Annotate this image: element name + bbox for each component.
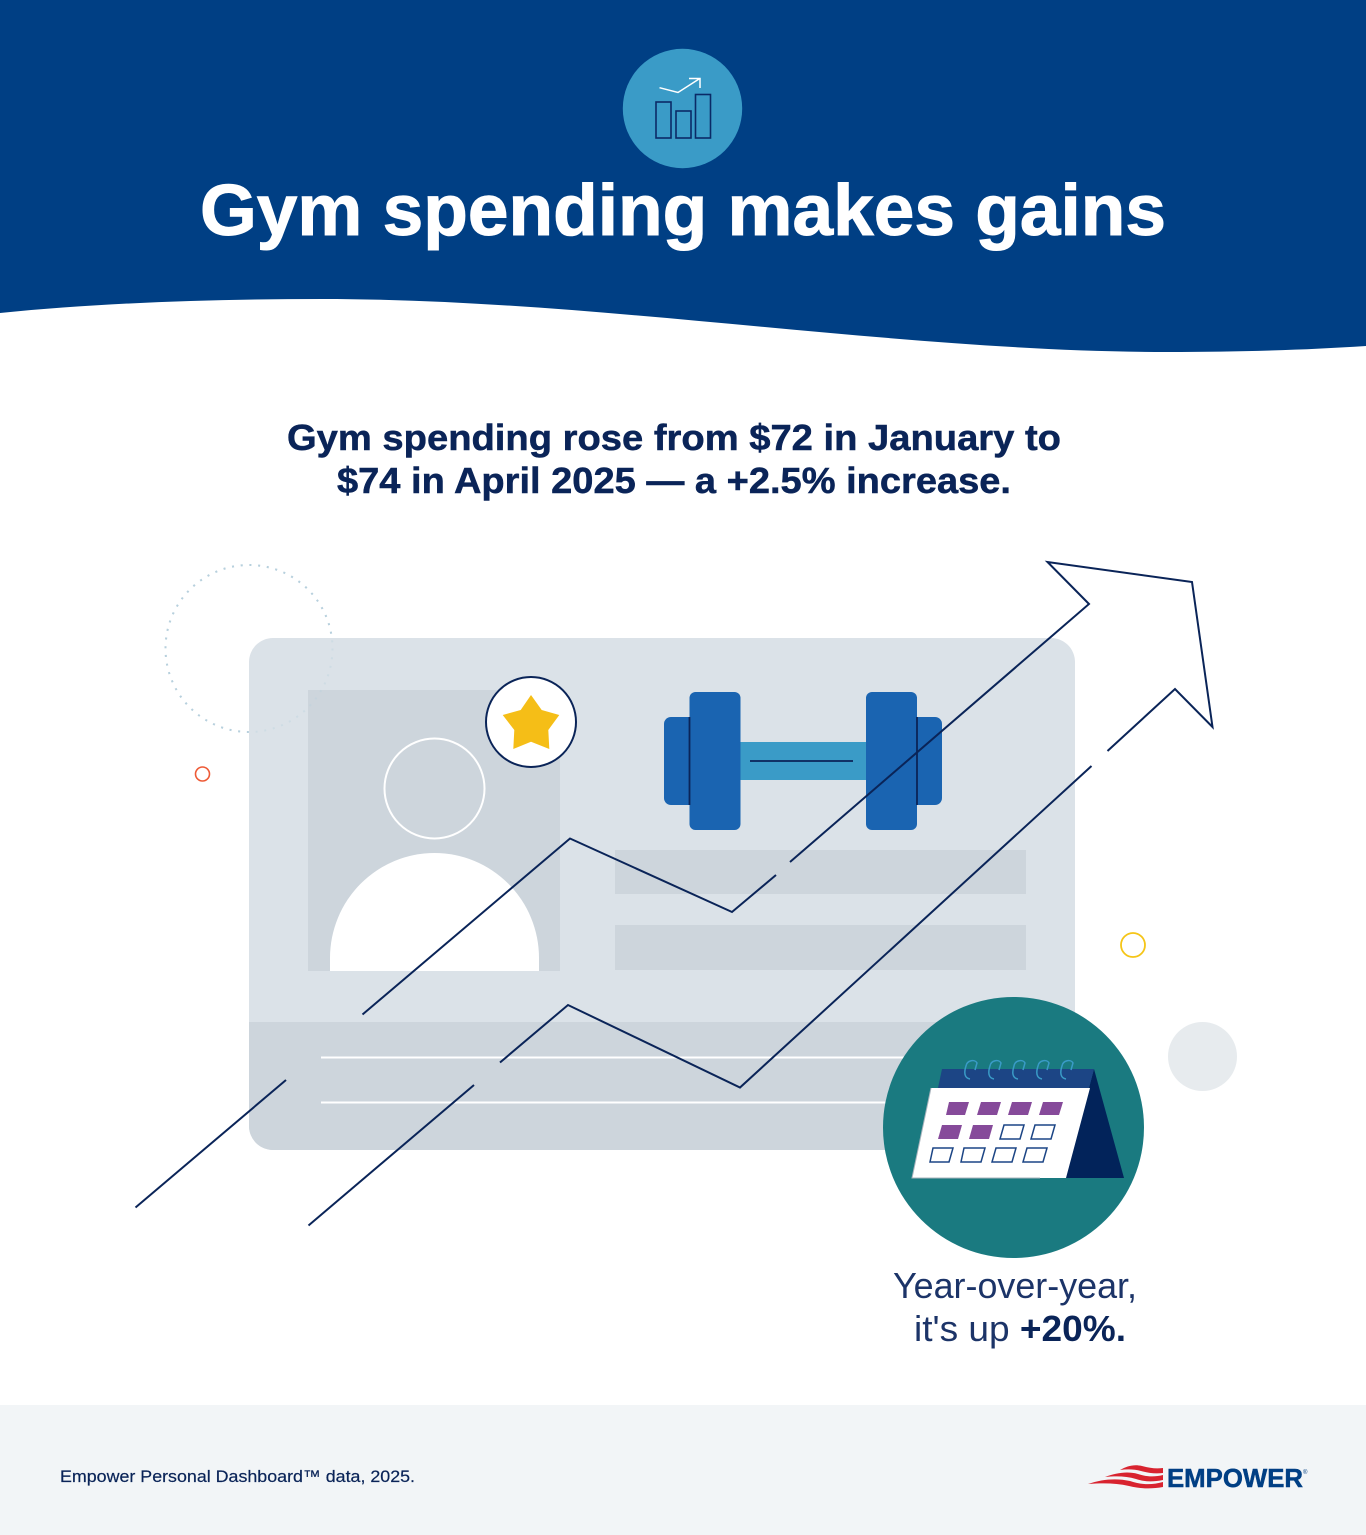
decorative dotted circle <box>166 565 332 732</box>
icon: star badge <box>486 677 576 767</box>
callout: year over year: Year-over-year, <box>893 1265 1137 1306</box>
footer band <box>0 1405 1366 1535</box>
footer lines <box>321 1058 940 1102</box>
panel: profile card <box>166 565 1075 1150</box>
header banner <box>0 0 1366 352</box>
orange ring <box>196 767 210 781</box>
logo: Empower: EMPOWER <box>1167 1463 1303 1493</box>
source note: Empower Personal Dashboard™ data, 2025. <box>60 1467 415 1486</box>
calendar stand <box>1065 1069 1124 1178</box>
calendar page <box>912 1088 1090 1178</box>
filled days <box>938 1102 1063 1139</box>
faint dots showing through card <box>166 565 332 732</box>
icon: bar chart with rising arrow <box>623 49 742 168</box>
logo: Empower <box>1088 1463 1308 1493</box>
registered mark: ® <box>1303 1469 1308 1476</box>
subtitle: Gym spending rose from $72 in January to <box>287 417 1061 458</box>
callout: year over year: it's up +20%. <box>914 1308 1126 1349</box>
subtitle: $74 in April 2025 — a +2.5% increase. <box>337 460 1011 501</box>
icon: calendar badge <box>883 997 1144 1258</box>
photo area <box>308 690 560 971</box>
arrow: rising outline arrow <box>136 562 1212 1226</box>
title: Gym spending makes gains <box>200 171 1166 251</box>
calendar header <box>938 1069 1094 1088</box>
subtitle <box>287 417 1061 501</box>
calendar rings <box>965 1061 1073 1079</box>
callout: year over year <box>893 1265 1137 1349</box>
icon: person <box>330 738 539 971</box>
grey dot <box>1168 1022 1237 1091</box>
card footer band <box>249 1022 1075 1150</box>
empty days <box>930 1125 1055 1162</box>
text placeholder bars <box>615 850 1026 970</box>
yellow ring <box>1121 933 1145 957</box>
icon: dumbbell <box>664 692 942 830</box>
